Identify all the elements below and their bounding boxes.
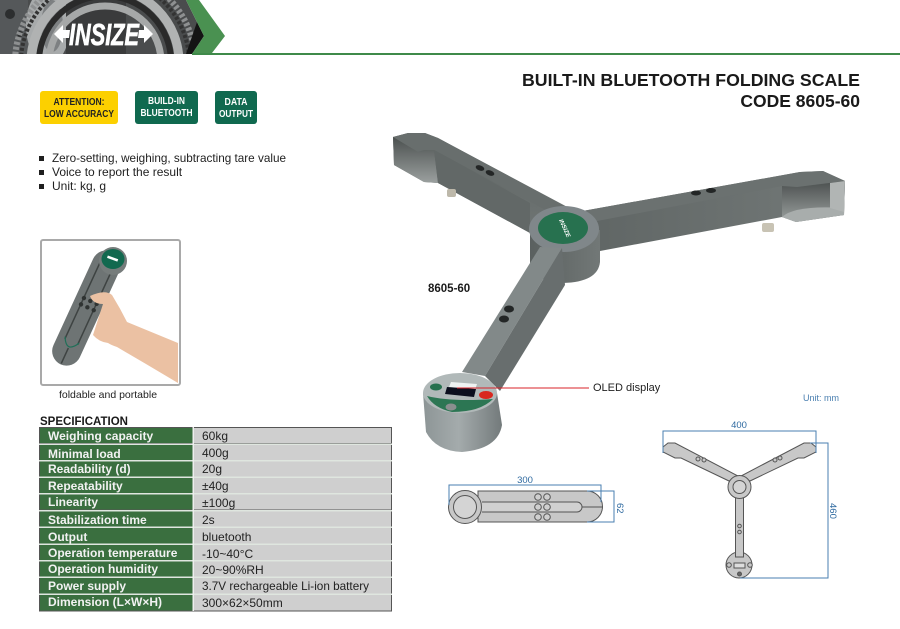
row: operation temperature: Operation temperature	[48, 546, 178, 560]
badge: attention low accuracy: LOW ACCURACY	[44, 108, 114, 120]
row: linearity: Linearity	[48, 495, 98, 509]
drawing: unfolded scale dimensions	[663, 420, 838, 578]
fingers behind scale	[71, 289, 89, 315]
title: CODE 8605-60	[740, 91, 860, 111]
row: operation humidity: Operation humidity	[48, 562, 158, 576]
drawing: unfolded scale dimensions: 460	[827, 503, 838, 519]
unit label: Unit: mm	[803, 393, 839, 403]
feature list	[39, 151, 286, 193]
drawing: folded scale dimensions	[448, 475, 625, 524]
row: stabilization time: 2s	[202, 513, 215, 527]
row: power supply: Power supply	[48, 579, 126, 593]
header machinery photo	[0, 0, 204, 54]
row: linearity	[39, 493, 392, 510]
badge: attention low accuracy: ATTENTION:	[54, 96, 104, 108]
folded scale	[47, 246, 126, 370]
header rule	[192, 53, 900, 55]
row: repeatability: ±40g	[202, 479, 229, 493]
model label: 8605-60	[428, 283, 470, 295]
scale head	[99, 247, 127, 275]
foot with display	[423, 373, 502, 452]
badge: data output	[215, 91, 257, 124]
row: repeatability: Repeatability	[48, 479, 123, 493]
badge: data output: DATA	[224, 96, 248, 108]
unfolded scale outline	[663, 443, 816, 578]
header banner	[0, 0, 900, 55]
drawing: folded scale dimensions: 62	[614, 503, 625, 514]
logo: INSIZE: INSIZE	[69, 17, 140, 52]
specification heading: SPECIFICATION	[40, 416, 128, 428]
left arm	[393, 133, 573, 233]
row: repeatability	[39, 476, 392, 493]
row: weighing capacity: Weighing capacity	[48, 429, 153, 443]
badge: build-in bluetooth	[135, 91, 198, 124]
row: readability: 20g	[202, 462, 222, 476]
hub	[529, 206, 600, 283]
hub: INSIZE	[557, 219, 571, 240]
row: minimal load: 400g	[202, 446, 229, 460]
row: output	[39, 526, 392, 544]
badge: build-in bluetooth: BUILD-IN	[148, 95, 185, 107]
product photo: folding scale	[393, 133, 845, 452]
row: stabilization time: Stabilization time	[48, 513, 147, 527]
drawing: folded scale dimensions: 300	[517, 475, 533, 486]
row: readability	[39, 460, 392, 476]
row: minimal load	[39, 444, 392, 461]
feature list: Voice to report the result	[52, 165, 183, 179]
row: operation temperature	[39, 544, 392, 561]
title: BUILT-IN BLUETOOTH FOLDING SCALE	[522, 70, 860, 90]
feature list: Zero-setting, weighing, subtracting tare value	[52, 151, 286, 165]
folded scale outline	[448, 490, 602, 524]
row: dimension: Dimension (L×W×H)	[48, 595, 162, 609]
row: weighing capacity	[40, 428, 391, 443]
row: operation humidity: 20~90%RH	[202, 563, 264, 577]
row: operation humidity	[39, 560, 392, 577]
row: output: Output	[48, 530, 87, 544]
row: operation temperature: -10~40°C	[202, 547, 253, 561]
row: power supply	[39, 576, 392, 594]
title	[522, 70, 860, 111]
callout: OLED display: OLED display	[593, 382, 661, 394]
row: output: bluetooth	[202, 530, 251, 544]
row: readability: Readability (d)	[48, 462, 131, 476]
row: dimension	[39, 594, 392, 610]
photo: foldable and portable	[41, 240, 180, 401]
dimension lines	[449, 485, 614, 522]
row: minimal load: Minimal load	[48, 447, 121, 461]
badge: build-in bluetooth: BLUETOOTH	[140, 107, 192, 119]
hand and forearm	[90, 292, 178, 383]
badge: data output: OUTPUT	[219, 108, 253, 120]
bottom arm	[462, 247, 565, 391]
right arm	[577, 171, 845, 251]
row: weighing capacity: 60kg	[202, 429, 228, 443]
column divider	[192, 427, 194, 611]
dimension lines	[663, 431, 828, 578]
drawing: unfolded scale dimensions: 400	[731, 420, 747, 431]
badge: attention low accuracy	[40, 91, 118, 124]
row: power supply: 3.7V rechargeable Li-ion battery	[202, 579, 369, 593]
green chevron	[186, 0, 225, 54]
row: stabilization time	[39, 510, 392, 527]
row: dimension: 300×62×50mm	[202, 596, 283, 610]
row: linearity: ±100g	[202, 496, 235, 510]
feature list: Unit: kg, g	[52, 179, 106, 193]
caption: foldable and portable	[59, 389, 157, 401]
specification table	[39, 427, 392, 612]
